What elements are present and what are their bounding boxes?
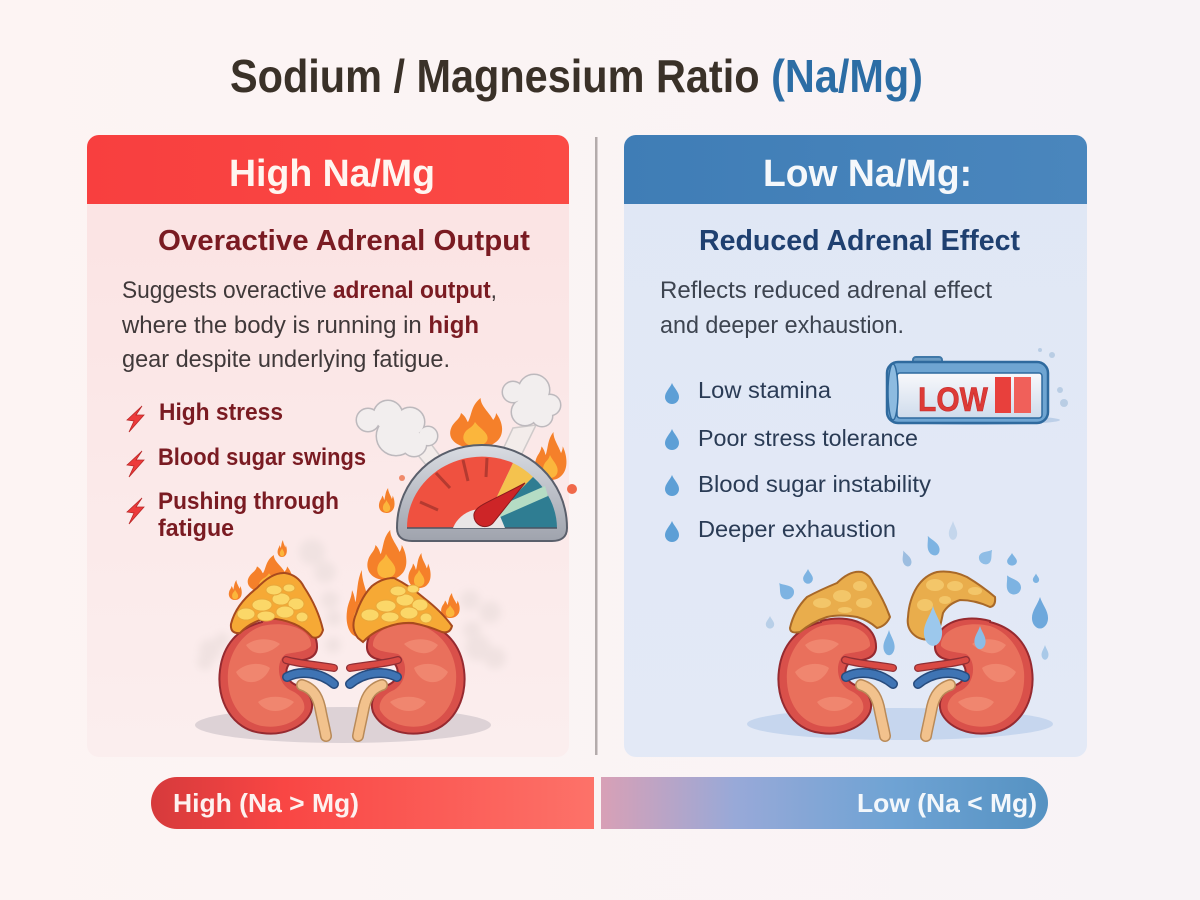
bullet: poor stress tolerance: Poor stress tolerance <box>698 425 918 451</box>
kidney: left <box>778 619 893 736</box>
scale segment: low <box>601 777 1048 829</box>
panel header: low: Low Na/Mg: <box>763 153 972 195</box>
icon: overheating gauge <box>357 375 577 541</box>
bullet: blood sugar instability: Blood sugar instability <box>698 471 932 497</box>
illustration: fatigued kidneys and adrenals <box>747 521 1053 740</box>
panel: high Na/Mg <box>87 135 577 757</box>
adrenal gland: left <box>790 572 890 632</box>
subheading: reduced adrenal effect: Reduced Adrenal Effect <box>699 225 1020 257</box>
panel background: low <box>624 135 1087 757</box>
ratio scale bar <box>151 777 1048 829</box>
adrenal gland: right <box>353 578 452 642</box>
kidney: left <box>219 619 334 736</box>
bullet: deeper exhaustion: Deeper exhaustion <box>698 516 896 542</box>
description text: high: where the body is running in high <box>121 312 479 339</box>
description text: high <box>121 277 497 373</box>
description text: low: and deeper exhaustion. <box>660 312 904 339</box>
icon: low battery <box>887 348 1068 425</box>
panel: low Na/Mg <box>624 135 1087 757</box>
subheading: overactive adrenal output: Overactive Adrenal Output <box>158 225 530 257</box>
bullet: high stress <box>127 399 283 432</box>
bullet list: low symptoms <box>665 377 932 542</box>
panel header: high: High Na/Mg <box>229 153 435 195</box>
bullet: pushing through fatigue <box>127 488 339 542</box>
description text: low <box>660 277 992 339</box>
bullet: pushing through fatigue: Pushing through <box>158 488 339 515</box>
bullet: blood sugar swings: Blood sugar swings <box>158 444 366 471</box>
bullet: pushing through fatigue: fatigue <box>158 515 234 542</box>
adrenal gland: right <box>908 572 995 640</box>
scale segment: high <box>151 777 594 829</box>
panel header: low <box>624 135 1087 204</box>
description text: high: gear despite underlying fatigue. <box>122 346 450 373</box>
description text: low: Reflects reduced adrenal effect <box>660 277 992 304</box>
panel background: high <box>87 135 569 757</box>
center divider <box>595 137 598 755</box>
scale segment: low: Low (Na < Mg) <box>857 788 1037 818</box>
kidney: right <box>918 619 1033 736</box>
kidney: right <box>350 619 465 736</box>
adrenal gland: left <box>231 573 323 638</box>
bullet: high stress: High stress <box>159 399 283 426</box>
bullet: low stamina: Low stamina <box>698 377 831 403</box>
description text: high: Suggests overactive adrenal output, <box>122 277 497 304</box>
illustration: inflamed kidneys and adrenals <box>195 530 506 743</box>
bullet: blood sugar swings <box>127 444 366 477</box>
sweat drops <box>766 521 1048 660</box>
bullet list: high symptoms <box>127 399 366 542</box>
panel header: high <box>87 135 569 204</box>
title: Sodium / Magnesium Ratio (Na/Mg) <box>230 50 923 102</box>
scale segment: high: High (Na > Mg) <box>173 788 359 818</box>
icon: low battery: LOW <box>918 381 989 419</box>
